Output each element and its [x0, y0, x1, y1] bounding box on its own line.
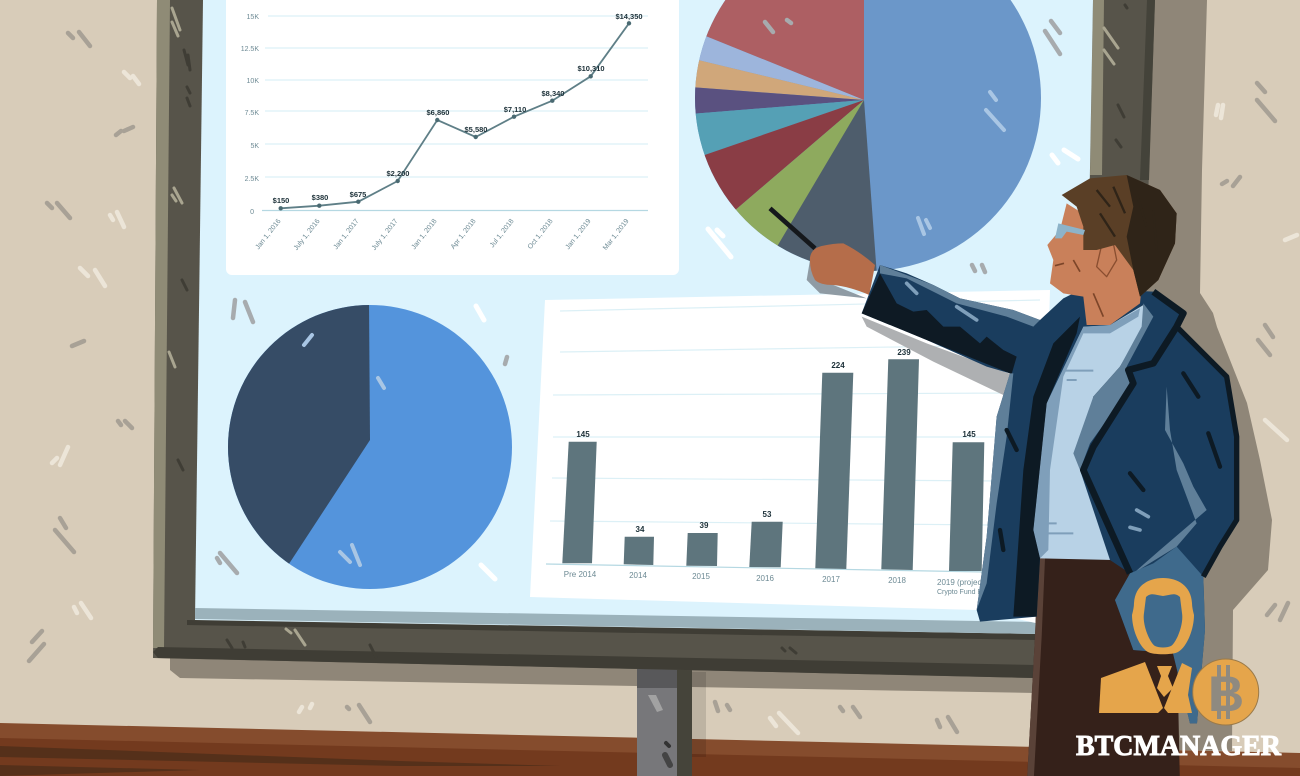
jacket creases: [1000, 373, 1220, 550]
bar categories: 2015: [692, 572, 710, 581]
bar values: 239: [897, 348, 911, 357]
value labels: $675: [350, 190, 366, 199]
date labels: Jan 1, 2018: [411, 218, 439, 251]
value labels: $8,340: [542, 89, 564, 98]
date labels: Jan 1, 2016: [255, 218, 283, 251]
value labels: [273, 12, 643, 205]
projection screen: [195, 0, 1093, 634]
value labels: $6,860: [427, 108, 449, 117]
bar values: 224: [831, 361, 845, 370]
jacket highlights: [907, 283, 1148, 530]
logo: BTCManager: [1076, 578, 1282, 762]
date labels: Apr 1, 2018: [450, 218, 478, 251]
bar chart grid: [546, 300, 1040, 572]
frame marks: [178, 5, 1127, 657]
hand: [810, 243, 875, 295]
lapel highlight: [1073, 303, 1153, 470]
bar values: 145: [962, 430, 976, 439]
screen marks: [217, 20, 1060, 573]
date labels: Oct 1, 2018: [527, 218, 555, 251]
bar categories: [564, 570, 1008, 596]
date labels: [255, 218, 631, 252]
icon: bitcoin coin: [1193, 659, 1259, 725]
bar values: 53: [763, 510, 772, 519]
y axis labels: 5K: [250, 143, 259, 150]
t-shirt: [1033, 305, 1143, 560]
date labels: July 1, 2016: [293, 218, 322, 252]
value labels: $7,110: [504, 105, 526, 114]
jacket outline: [1177, 327, 1237, 577]
board frame: [153, 0, 1155, 678]
hair: [1062, 175, 1177, 297]
chart grid and axis: [262, 16, 648, 210]
value labels: $10,310: [577, 64, 605, 73]
hand shadow: [807, 260, 867, 298]
wooden floor: [0, 723, 1300, 776]
value labels: $380: [312, 193, 328, 202]
bar categories: Pre 2014: [564, 570, 597, 579]
lapel outline: [1083, 292, 1183, 573]
left edge highlight: [977, 373, 1013, 610]
stand: [637, 668, 706, 776]
logo wordmark: BTCMANAGER: [1076, 730, 1282, 762]
bar values: 39: [700, 521, 709, 530]
value labels: $2,200: [387, 169, 409, 178]
bar values: 145: [576, 430, 590, 439]
pie highlights: [304, 92, 1004, 565]
bar categories: 2014: [629, 571, 647, 580]
price line: [278, 21, 631, 210]
panel: line chart: [226, 0, 679, 275]
y axis labels: [241, 14, 259, 216]
date labels: Mar 1, 2019: [602, 218, 631, 252]
ear: [1097, 243, 1117, 277]
screen highlights: [476, 150, 1078, 579]
pie chart: top right: [695, 0, 1041, 271]
y axis labels: 7.5K: [245, 110, 259, 117]
jacket: [862, 265, 1237, 723]
y axis labels: 2.5K: [245, 176, 259, 183]
face lines: [1055, 260, 1103, 317]
panel: bar chart: [530, 290, 1050, 624]
frame highlights: [169, 8, 1118, 645]
sleeve underside: [862, 273, 1017, 374]
icon: bitcoin coin: B: [1208, 666, 1244, 722]
y axis labels: 15K: [247, 14, 259, 21]
frame shadow on wall: [170, 658, 1035, 693]
trousers: [1027, 557, 1180, 776]
lower arm highlight: [1133, 387, 1207, 573]
inner dark lining: [1013, 317, 1080, 617]
sleeve highlight: [880, 265, 1040, 327]
arm shadow: [862, 317, 1013, 395]
icon: manager bust: [1099, 578, 1194, 713]
y axis labels: 0: [250, 209, 254, 216]
date labels: Jan 1, 2019: [565, 218, 593, 251]
y axis labels: 10K: [247, 78, 259, 85]
presenter figure: [770, 175, 1237, 776]
date labels: July 1, 2017: [371, 218, 400, 252]
bar values: 34: [636, 525, 645, 534]
bars: [562, 359, 984, 571]
date labels: Jan 1, 2017: [333, 218, 361, 251]
bar categories: Crypto Fund Research: [937, 589, 1008, 596]
bar categories: 2016: [756, 574, 774, 583]
shadow on wall right of frame and figure: [1100, 0, 1272, 751]
pie chart: bottom left: [220, 300, 520, 595]
y axis labels: 12.5K: [241, 46, 259, 53]
head: [1047, 175, 1177, 325]
value labels: $5,580: [465, 125, 487, 134]
value labels: $14,350: [615, 12, 643, 21]
bar categories: 2019 (projected): [937, 578, 996, 587]
date labels: Jul 1, 2018: [489, 218, 516, 249]
value labels: $150: [273, 196, 289, 205]
bar categories: 2018: [888, 576, 906, 585]
glasses: [1055, 223, 1085, 238]
bar categories: 2017: [822, 575, 840, 584]
pointer: [770, 208, 815, 248]
bar values: [576, 348, 976, 534]
